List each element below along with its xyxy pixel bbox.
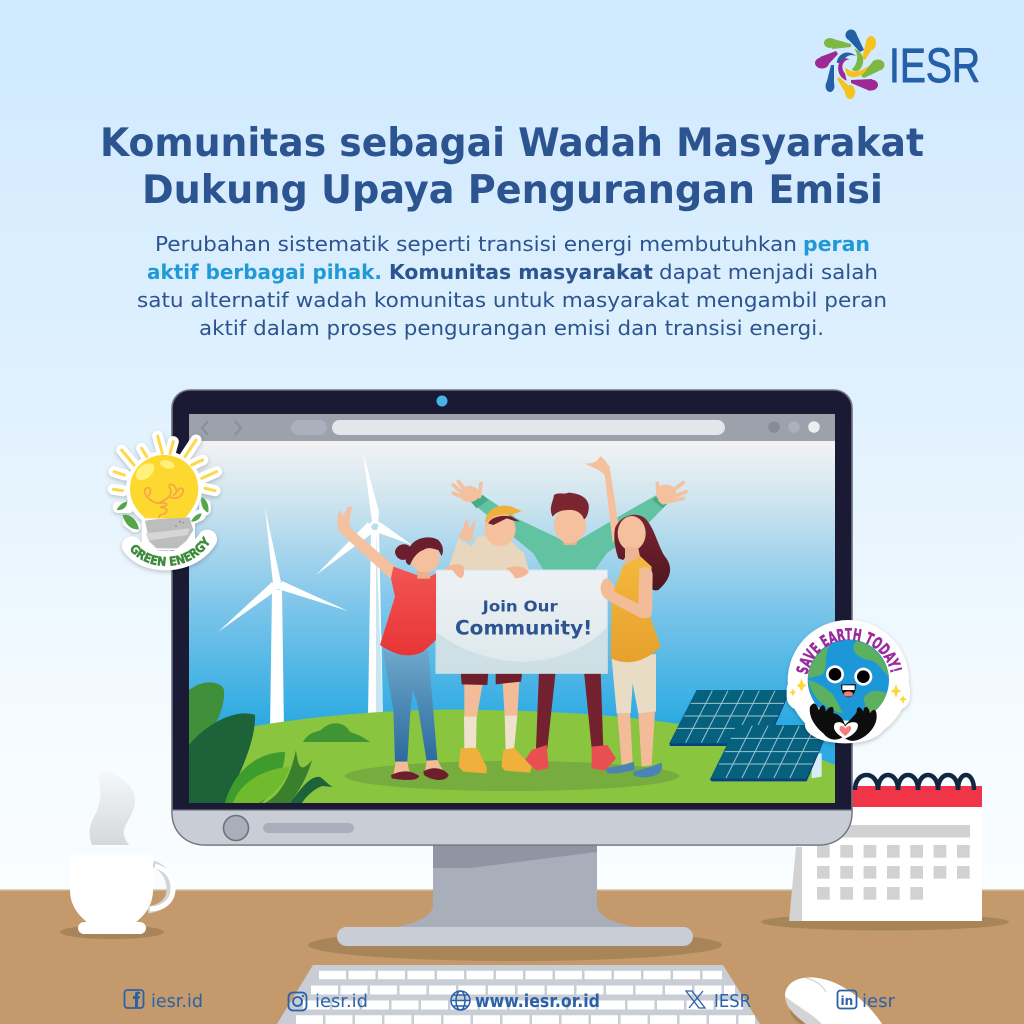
sign text: Join Our	[482, 599, 559, 616]
monitor	[172, 390, 852, 845]
sticker label	[129, 543, 210, 566]
logo wordmark: IESR	[889, 40, 980, 93]
sign	[436, 570, 607, 673]
mouse	[785, 977, 882, 1024]
title: Dukung Upaya Pengurangan Emisi	[142, 168, 883, 213]
intro text block	[137, 232, 887, 340]
earth globe	[808, 639, 889, 721]
logo: IESR	[815, 30, 980, 99]
calendar	[761, 775, 1009, 930]
webcam	[436, 396, 448, 406]
plants	[189, 682, 333, 803]
sticker outline	[113, 436, 217, 561]
intro text block: satu alternatif wadah komunitas untuk masyarakat mengambil peran	[137, 288, 887, 312]
sticker: save earth today: SAVE EARTH TODAY!	[796, 628, 902, 674]
sparkles	[790, 678, 907, 704]
linkedin link: in	[840, 994, 853, 1008]
intro text block: dapat menjadi salah	[659, 260, 878, 284]
screen scene	[189, 441, 835, 803]
person: woman raised arm	[604, 465, 619, 543]
hands holding heart	[810, 703, 877, 741]
sticker: green energy bulb	[106, 430, 224, 574]
bulb glass	[130, 455, 198, 518]
desk	[0, 889, 1024, 1024]
person: hoodie boy	[449, 506, 532, 773]
small bush	[303, 723, 370, 742]
logo swirl mark	[815, 30, 884, 99]
title: Komunitas sebagai Wadah Masyarakat	[100, 121, 924, 166]
monitor stand	[308, 845, 722, 961]
x link	[686, 991, 751, 1012]
solar panels	[669, 690, 831, 781]
wind turbine right	[316, 452, 412, 716]
footer social links	[124, 990, 896, 1012]
intro text block: Komunitas masyarakat	[389, 260, 653, 284]
sky	[189, 441, 835, 803]
monitor bezel	[172, 390, 852, 845]
intro text block: aktif dalam proses pengurangan emisi dan transisi energi.	[199, 316, 824, 340]
x link: IESR	[714, 991, 751, 1012]
instagram link: iesr.id	[315, 991, 368, 1012]
people with sign	[337, 456, 686, 780]
hill	[189, 710, 835, 803]
wind turbine left	[218, 508, 348, 730]
linkedin link: iesr	[862, 991, 896, 1012]
sign: Community!	[455, 616, 592, 639]
website link: www.iesr.or.id	[475, 991, 600, 1012]
person: yellow dress girl	[601, 515, 670, 777]
keyboard	[277, 965, 760, 1024]
coffee cup	[60, 770, 173, 939]
linkedin link	[838, 990, 896, 1012]
bulb base	[145, 517, 193, 548]
ground shadow	[345, 761, 679, 791]
hands on sign	[444, 564, 529, 578]
person: red shirt girl	[337, 507, 449, 780]
intro text block: Perubahan sistematik seperti transisi energi membutuhkan	[155, 232, 797, 256]
monitor chin	[172, 810, 852, 845]
intro text block: peran	[803, 232, 870, 256]
instagram link	[288, 991, 368, 1012]
rays	[113, 436, 217, 491]
facebook link: iesr.id	[151, 991, 203, 1012]
title	[100, 121, 924, 213]
leaves	[117, 497, 209, 529]
sticker label	[807, 640, 891, 675]
sticker: save earth today	[785, 620, 912, 746]
browser toolbar	[189, 414, 835, 442]
sticker: green energy bulb: GREEN ENERGY	[130, 536, 210, 566]
facebook link	[124, 990, 203, 1012]
sticker outline	[787, 620, 910, 743]
earth face	[826, 665, 872, 697]
raised hand	[584, 456, 609, 475]
person: green shirt	[453, 482, 686, 771]
intro text block: aktif berbagai pihak.	[147, 260, 382, 284]
